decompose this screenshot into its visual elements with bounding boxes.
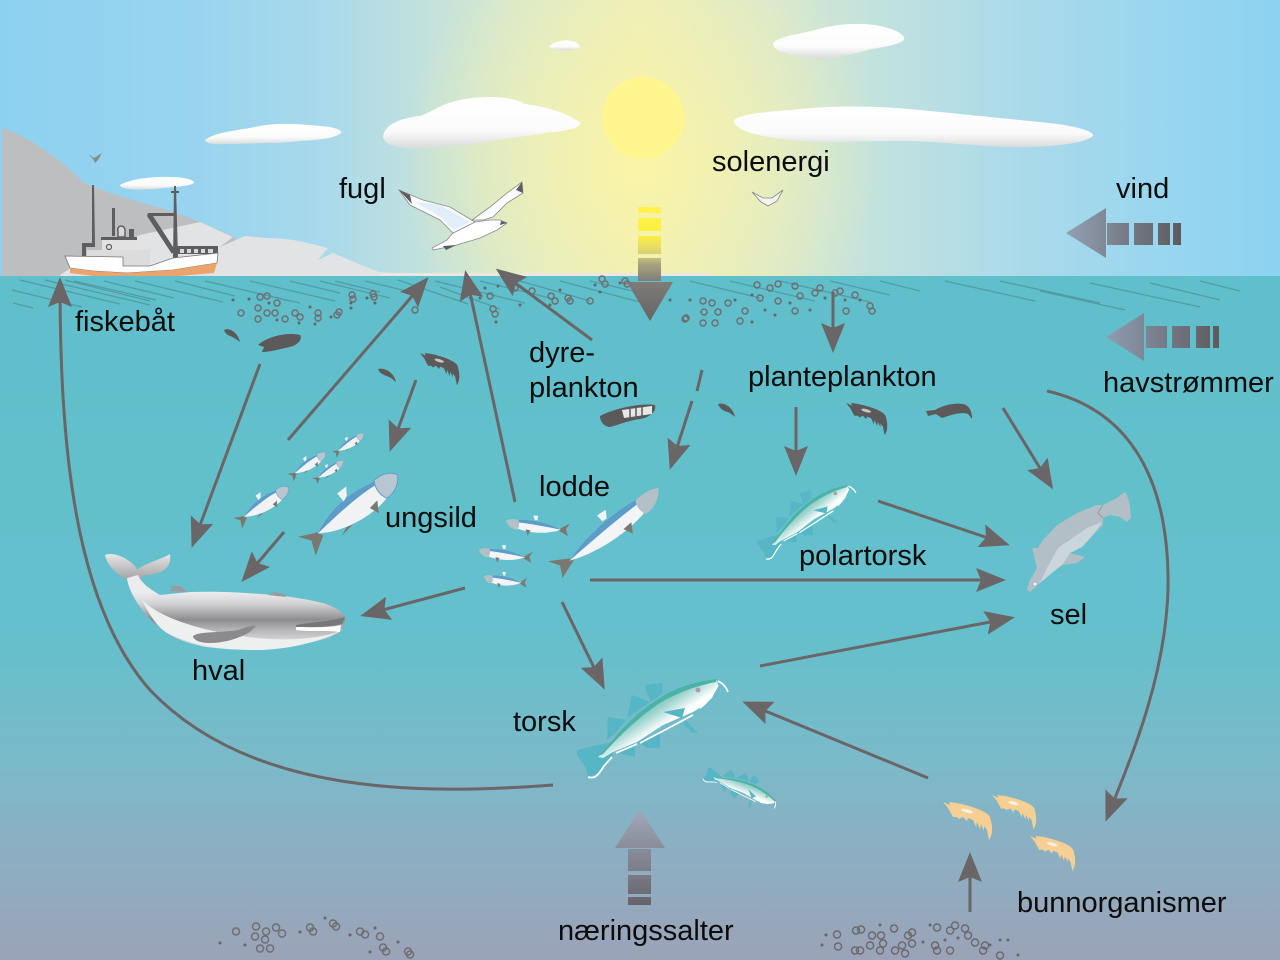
arrow: cod to seal [760,618,1011,666]
fish: juvenile herring school [229,429,410,558]
label: næringssalter: næringssalter [558,915,734,947]
icon: krill upper right 1 [846,403,887,435]
arrow: capelin to bird [466,274,515,502]
icon: small krill [378,369,396,382]
waterline highlight [380,273,710,276]
label: lodde: lodde [539,471,610,503]
icon: dark copepod near boat [258,334,301,352]
arrow: solar energy [627,207,673,321]
plankton: seabed left nutrients [220,918,414,958]
label: sel: sel [1050,599,1087,631]
arrow: krill to seal [1003,408,1051,486]
icon: krill blob near boat [224,329,240,342]
icon: whale [105,554,345,650]
arrow: herring to bird [288,280,426,440]
arrow: nutrients to benthic organisms [968,856,972,912]
arrow: zooplankton to bird [499,271,592,340]
sun [602,77,684,159]
label: bunnorganismer: bunnorganismer [1017,887,1227,919]
arrow: capelin to whale [364,588,465,615]
icon: fishing boat [65,185,218,278]
cloud: long right [734,106,1093,147]
label: fugl: fugl [339,173,386,205]
plankton: upper left cluster [233,291,418,324]
plankton: right cluster [683,281,875,326]
label: hval: hval [192,655,245,687]
icon: benthic shrimp group [943,795,1075,871]
arrow: nutrients upward [615,809,665,905]
label: dyreplankton: plankton [529,372,639,404]
arrow: polar cod to seal [878,501,1006,544]
sea background [0,276,1280,960]
arrow: phytoplankton to capelin [671,370,702,466]
plankton: seabed right nutrients [822,922,1018,959]
label: dyreplankton: dyre- [529,337,595,369]
fish: cod [577,679,728,778]
arrow: plankton to polar cod [794,407,798,472]
sky background [0,0,1280,277]
mountains [2,128,420,277]
label: planteplankton: planteplankton [748,361,937,393]
label: polartorsk: polartorsk [799,540,927,572]
icon: small distant bird [88,153,102,163]
label: fiskebåt: fiskebåt [75,306,175,338]
cloud: tiny top [549,40,580,50]
label: ungsild: ungsild [385,502,477,534]
arrow: capelin to seal [590,578,1002,582]
arrow: zooplankton to herring [391,380,416,448]
icon: krill upper right 2 [926,404,972,419]
arrow: phytoplankton up link [832,292,834,349]
arrow: capelin to cod [562,602,603,686]
label: solenergi: solenergi [712,146,830,178]
arrow: wind [1066,208,1181,258]
arrow: whale food to fishing boat [60,281,553,789]
cloud: top right [773,24,904,59]
cloud: far left [205,124,341,144]
label: dyreplankton [529,337,639,404]
icon: small krill centre [718,404,735,417]
icon: seal [1027,492,1131,592]
fish: polar cod [753,484,861,560]
icon: large seagull [399,182,523,250]
label: torsk: torsk [513,706,576,738]
icon: small seagull [752,190,783,206]
label: havstrømmer: havstrømmer [1103,367,1274,399]
arrow: benthic organisms to cod [746,703,928,778]
arrow: krill to whale [193,364,260,544]
icon: zooplankton shrimp [420,353,459,385]
cloud: above boat [120,177,194,190]
arrow: ocean currents [1106,313,1219,361]
surface hatching [12,280,1240,310]
arrow: current curve to benthic organisms [1047,391,1168,818]
cloud: centre left [383,97,581,148]
arrow: herring to whale [244,532,284,579]
icon: copepod [600,405,655,427]
fish: capelin school [478,478,672,589]
label: vind: vind [1116,173,1169,205]
fish: small cod [700,748,779,832]
plankton: centre cluster [480,276,688,322]
